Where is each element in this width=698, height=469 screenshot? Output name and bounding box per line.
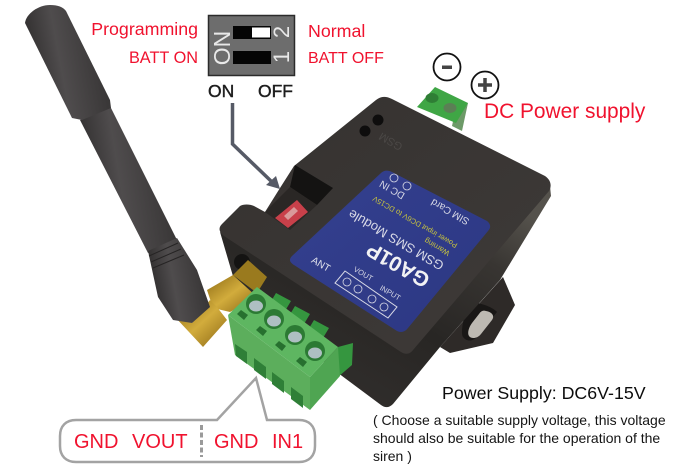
right switch labels: BATT OFF (308, 50, 384, 67)
ON marking: ON (209, 31, 235, 65)
terminal slots (237, 310, 307, 367)
DIP switch recess (265, 165, 333, 230)
supply note: ( Choose a suitable supply voltage, this voltage (373, 412, 666, 428)
polarity symbols (434, 54, 498, 98)
antenna connector (175, 254, 267, 347)
ON OFF labels: OFF (258, 81, 293, 101)
SIM card label: SIM Card (429, 196, 472, 226)
switch numbers: 2 (269, 26, 294, 38)
mounting bracket (440, 277, 515, 353)
terminal openings (235, 344, 303, 408)
terminal names: VOUT (132, 431, 188, 453)
right switch labels (308, 21, 384, 67)
device: GA01P module (220, 97, 551, 407)
ANT label: ANT (309, 255, 332, 275)
ON OFF labels (208, 81, 293, 101)
wiring callout (60, 378, 315, 462)
body top face (220, 97, 551, 354)
DC power supply label: DC Power supply (484, 100, 646, 123)
body side faces (220, 186, 551, 407)
terminal names: GND (74, 431, 118, 453)
switch 2 slider (233, 26, 271, 39)
supply note: siren ) (373, 448, 412, 464)
voltage warning: Power input DC6V to DC15V (371, 194, 459, 250)
warning: Warning (423, 236, 451, 258)
module name: GSM SMS Module (346, 207, 446, 273)
antenna (25, 5, 210, 323)
terminal legend: VOUT (352, 265, 375, 283)
arrow to DIP switch (232, 103, 280, 189)
DC IN label: DC IN (378, 178, 407, 201)
switch 1 slider (233, 51, 271, 64)
supply note (373, 412, 666, 464)
terminal legend: INPUT (378, 283, 403, 303)
ON OFF labels: ON (208, 81, 234, 101)
right switch labels: Normal (308, 21, 365, 41)
SIM holes (360, 114, 384, 136)
left switch labels (91, 19, 198, 67)
red DIP switch (275, 200, 308, 228)
DIP switch diagram (208, 16, 294, 76)
left switch labels: Programming (91, 19, 198, 39)
model name: GA01P (363, 237, 434, 292)
DC power terminal (417, 87, 468, 131)
supply note: should also be suitable for the operation of the (373, 430, 660, 446)
DC IN polarity icons (390, 174, 411, 190)
terminal screws (246, 294, 325, 361)
terminal legend (335, 265, 403, 318)
terminal names: GND (214, 431, 258, 453)
power supply heading: Power Supply: DC6V-15V (442, 383, 646, 403)
green wiring terminal (228, 287, 353, 410)
terminal names (74, 431, 303, 453)
rear pins (270, 293, 353, 377)
DIP switch diagram: 1 (269, 51, 294, 63)
GSM embossed marking: GSM (377, 130, 405, 152)
terminal names: IN1 (272, 431, 303, 453)
blue label (290, 171, 490, 332)
left switch labels: BATT ON (129, 49, 198, 67)
